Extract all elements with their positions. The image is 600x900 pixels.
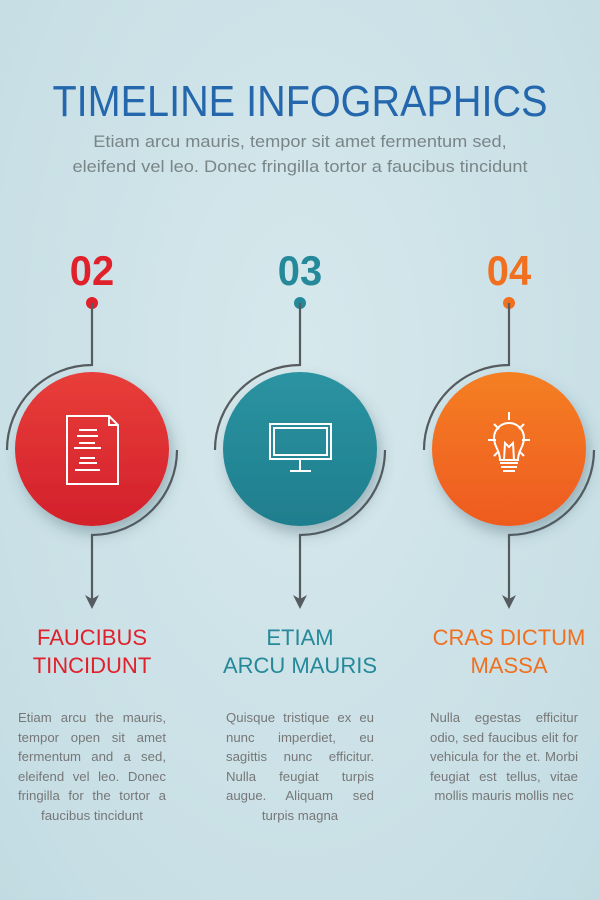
heading 2: ETIAM — [266, 625, 334, 650]
heading 2 — [223, 625, 377, 678]
step 03 — [215, 247, 385, 609]
body text 2: Quisque tristique ex eu nunc imperdiet, eu sagittis nunc efficitur. Nulla feugiat turpis augue. Aliquam sed turpis magna — [226, 710, 374, 822]
icon: light bulb — [488, 412, 530, 471]
step 02: 02 — [70, 247, 114, 294]
subtitle — [72, 132, 528, 176]
step 03: 03 — [278, 247, 322, 294]
icon: monitor — [270, 424, 331, 471]
body text 3: Nulla egestas efficitur odio, sed faucibus elit for vehicula for the et. Morbi feugiat est tellus, vitae mollis mauris mollis nec — [430, 710, 578, 803]
heading 1 — [33, 625, 151, 678]
step 04 — [424, 247, 594, 609]
heading 3: MASSA — [470, 653, 548, 678]
subtitle: Etiam arcu mauris, tempor sit amet fermentum sed, — [93, 132, 507, 151]
title: TIMELINE INFOGRAPHICS — [52, 77, 548, 126]
step 02 — [7, 247, 177, 609]
heading 3: CRAS DICTUM — [433, 625, 585, 650]
heading 1: TINCIDUNT — [33, 653, 151, 678]
heading 2: ARCU MAURIS — [223, 653, 377, 678]
heading 1: FAUCIBUS — [37, 625, 147, 650]
icon: document — [67, 416, 118, 484]
body text 1: Etiam arcu the mauris, tempor open sit amet fermentum and a sed, eleifend vel leo. Donec fringilla for the tortor a faucibus tincidunt — [18, 710, 166, 822]
subtitle: eleifend vel leo. Donec fringilla tortor a faucibus tincidunt — [72, 157, 528, 176]
heading 3 — [433, 625, 585, 678]
step 04: 04 — [487, 247, 531, 294]
